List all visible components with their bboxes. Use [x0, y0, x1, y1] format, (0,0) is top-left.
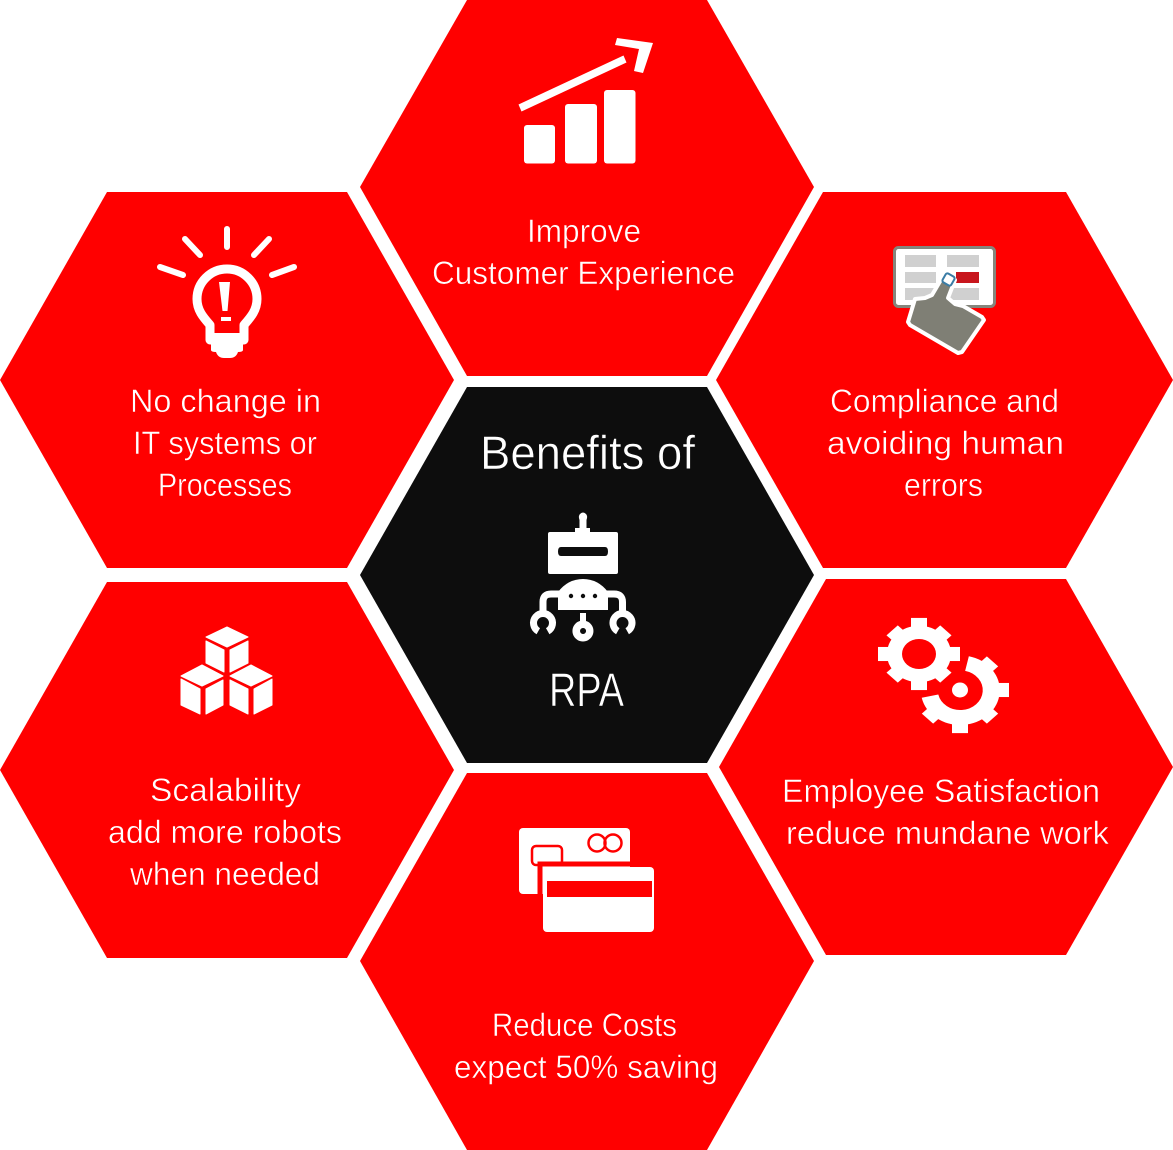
text: scalability add more robots when needed: add more robots: [108, 814, 342, 850]
label: RPA: RPA: [549, 663, 625, 716]
text: employee satisfaction reduce mundane work: Employee Satisfaction: [782, 773, 1100, 809]
panel: reduce costs: [360, 773, 814, 1150]
text: improve customer experience: [432, 213, 735, 291]
text: employee satisfaction reduce mundane work: [782, 773, 1110, 851]
panel: scalability: [0, 582, 454, 958]
icon: rising bar chart with arrow: [518, 38, 653, 164]
text: no change in IT systems or processes: [130, 383, 321, 503]
text: compliance and avoiding human errors: avoiding human: [827, 425, 1064, 461]
text: compliance and avoiding human errors: errors: [904, 467, 983, 503]
panel: centre benefits of RPA: [360, 387, 814, 763]
panel: no change in IT systems: [0, 192, 454, 568]
text: improve customer experience: Improve: [527, 213, 641, 249]
text: no change in IT systems or processes: IT systems or: [133, 425, 317, 461]
heading: benefits of: Benefits of: [480, 426, 696, 479]
text: scalability add more robots when needed: [108, 772, 342, 892]
text: no change in IT systems or processes: No change in: [130, 383, 321, 419]
icon: robot: [534, 512, 632, 641]
text: scalability add more robots when needed: Scalability: [150, 772, 301, 808]
text: reduce costs expect 50% saving: Reduce Costs: [492, 1007, 677, 1043]
text: scalability add more robots when needed: when needed: [129, 856, 320, 892]
icon: finger touching a form: [894, 248, 994, 353]
text: no change in IT systems or processes: Processes: [158, 467, 292, 503]
panel: employee satisfaction: [719, 579, 1173, 955]
icon: stacked cubes: [181, 627, 272, 714]
icon: light bulb with exclamation mark: [160, 229, 294, 358]
text: reduce costs expect 50% saving: [454, 1007, 718, 1085]
panel: improve customer experience: [360, 0, 814, 376]
text: employee satisfaction reduce mundane work: reduce mundane work: [786, 815, 1110, 851]
icon: gears: [878, 618, 1009, 733]
icon: credit cards: [519, 828, 660, 932]
text: improve customer experience: Customer Experience: [432, 255, 735, 291]
text: compliance and avoiding human errors: Compliance and: [830, 383, 1059, 419]
text: reduce costs expect 50% saving: expect 50% saving: [454, 1049, 718, 1085]
text: compliance and avoiding human errors: [827, 383, 1064, 503]
panel: compliance: [716, 192, 1173, 568]
